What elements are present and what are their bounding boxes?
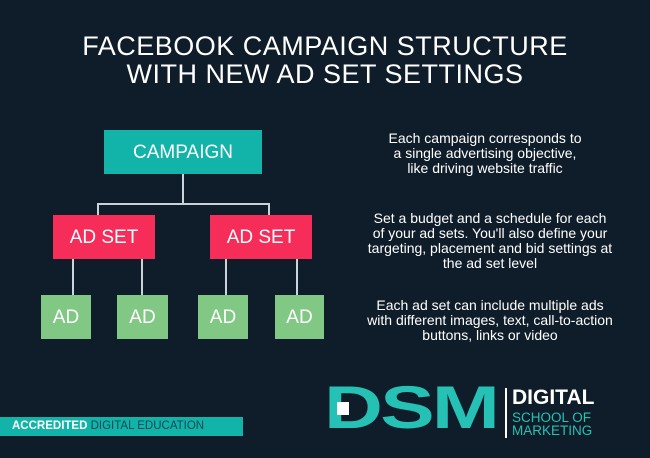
logo: DSM: [324, 374, 497, 441]
hierarchy diagram: AD SET: [227, 227, 295, 248]
hierarchy diagram: AD: [210, 307, 236, 328]
ad boxes: AD: [53, 307, 79, 328]
description: ad set: of your ad sets. You'll also define your: [373, 225, 607, 241]
logo: [324, 374, 594, 441]
title: [82, 31, 568, 89]
hierarchy diagram: AD: [286, 307, 313, 328]
description: ad: buttons, links or video: [422, 327, 558, 343]
description: ad: [367, 297, 613, 343]
description: ad set: [368, 210, 612, 271]
accredited banner: ACCREDITED DIGITAL EDUCATION: [12, 420, 204, 432]
description: campaign: like driving website traffic: [407, 160, 563, 176]
campaign box: CAMPAIGN: [133, 142, 233, 163]
hierarchy diagram: [41, 130, 324, 339]
description: ad: Each ad set can include multiple ads: [376, 297, 604, 313]
logo: MARKETING: [512, 423, 592, 438]
description: ad set: the ad set level: [443, 255, 537, 271]
description: campaign: a single advertising objective,: [394, 145, 576, 161]
description: ad: with different images, text, call-to-action: [367, 312, 613, 328]
description: ad set: Set a budget and a schedule for each: [374, 210, 606, 226]
logo: DIGITAL: [512, 386, 594, 409]
description: campaign: Each campaign corresponds to: [388, 130, 582, 146]
campaign box: [104, 130, 262, 174]
ad set boxes: AD SET: [70, 227, 138, 248]
title: WITH NEW AD SET SETTINGS: [126, 59, 524, 89]
ad boxes: [41, 295, 91, 339]
hierarchy diagram: AD: [129, 307, 156, 328]
title: FACEBOOK CAMPAIGN STRUCTURE: [82, 31, 568, 61]
accredited banner: [0, 417, 243, 436]
description: campaign: [388, 130, 582, 176]
logo: SCHOOL OF: [512, 410, 591, 425]
ad set boxes: [53, 215, 155, 259]
description: ad set: targeting, placement and bid settings at: [368, 240, 612, 256]
